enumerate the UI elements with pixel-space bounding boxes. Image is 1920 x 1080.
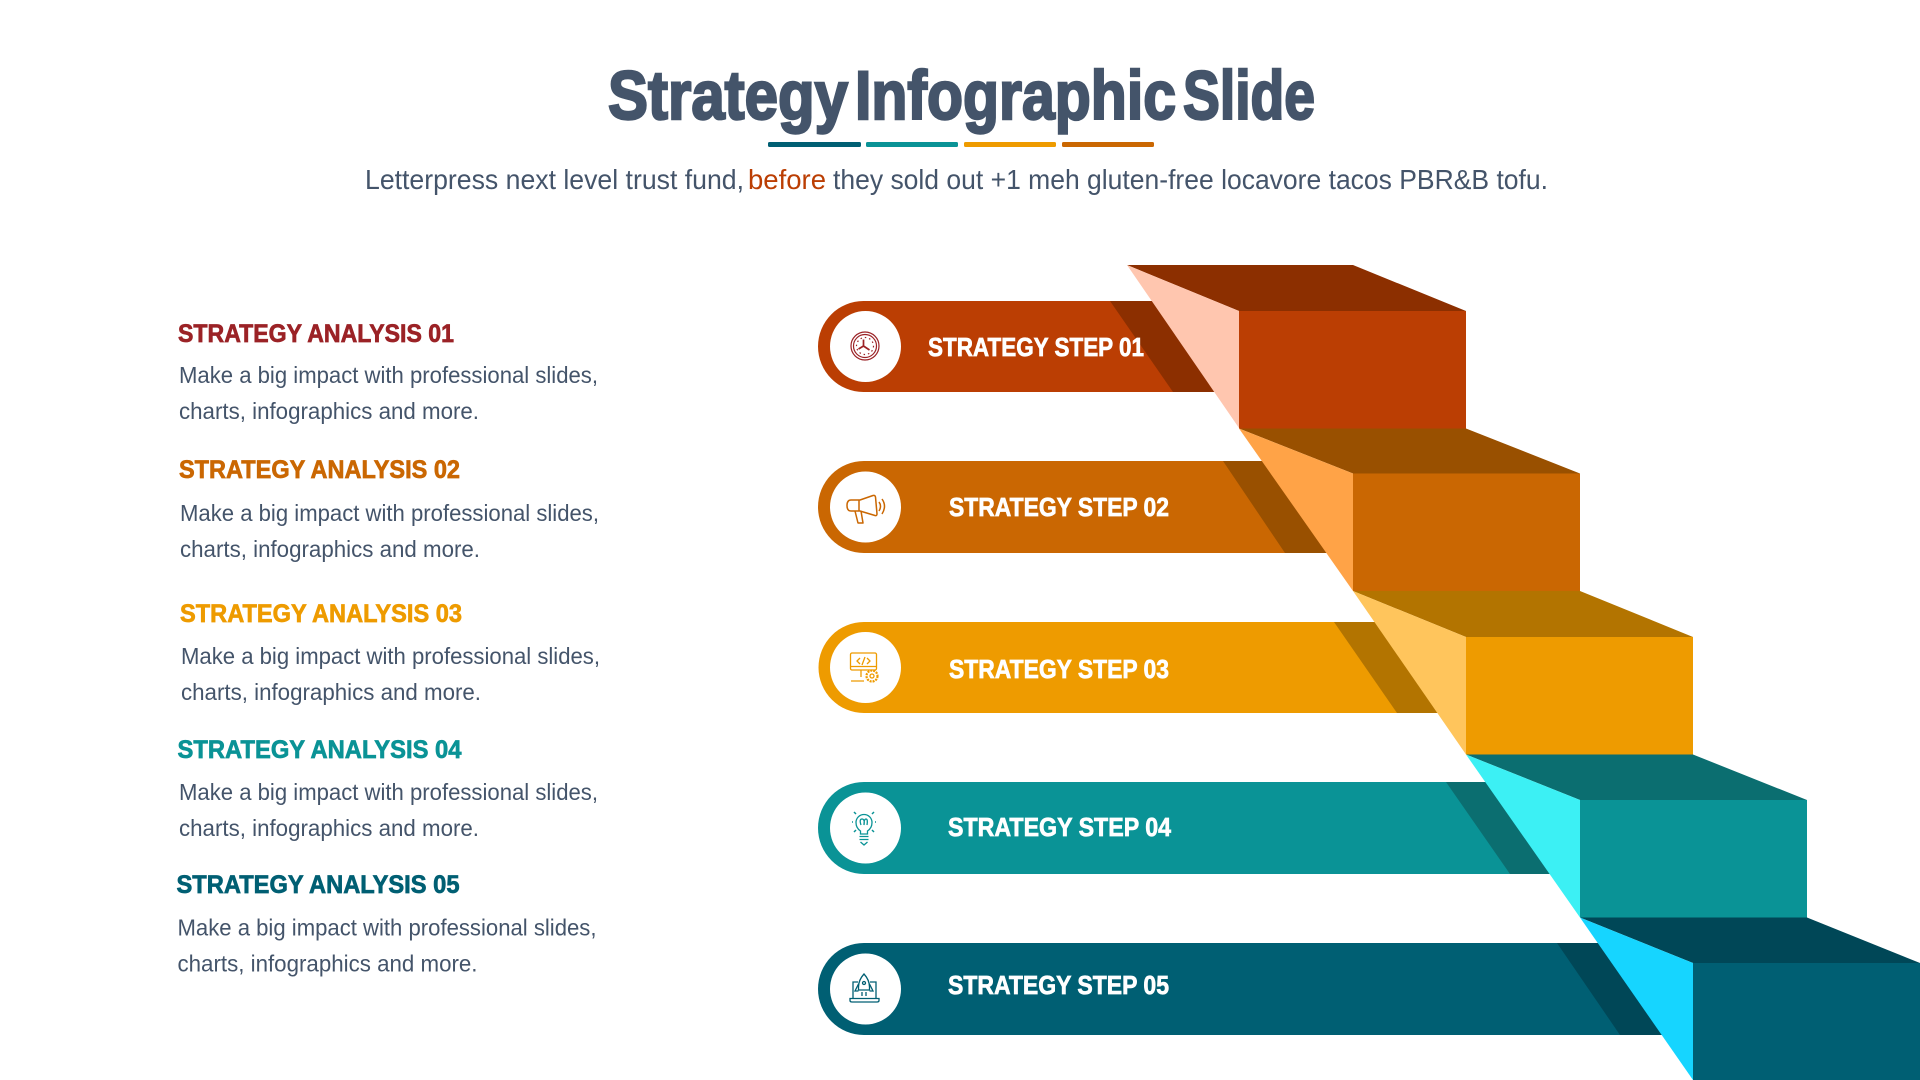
title (608, 57, 1315, 134)
text block: strategy analysis 02: Make a big impact with professional slides, (180, 500, 599, 526)
step bar 04 (818, 782, 1551, 874)
text block: strategy analysis 02 (179, 456, 599, 562)
text block: strategy analysis 04 (178, 736, 598, 841)
icon: light bulb (852, 812, 876, 845)
icon: clock (851, 332, 879, 360)
stair block 02 (1239, 428, 1580, 591)
text block: strategy analysis 03: charts, infographics and more. (181, 679, 481, 705)
text block: strategy analysis 03: Make a big impact with professional slides, (181, 643, 600, 669)
title: Slide (1183, 57, 1315, 134)
text block: strategy analysis 03: STRATEGY ANALYSIS 03 (180, 600, 462, 628)
step bar 02 (818, 461, 1327, 553)
label: strategy step 05: STRATEGY STEP 05 (948, 970, 1169, 1000)
subtitle: Letterpress next level trust fund, (365, 164, 744, 195)
icon: monitor with gear (850, 653, 878, 682)
text block: strategy analysis 01: Make a big impact with professional slides, (179, 362, 598, 388)
icon: megaphone (847, 495, 884, 523)
subtitle (365, 164, 1548, 195)
title: Infographic (855, 57, 1176, 134)
stair block 01 (1127, 265, 1466, 428)
text block: strategy analysis 05: Make a big impact with professional slides, (178, 914, 596, 940)
icon: rocket on laptop (850, 974, 879, 1002)
text block: strategy analysis 05: charts, infographics and more. (178, 950, 478, 976)
text block: strategy analysis 02: charts, infographics and more. (180, 536, 480, 562)
stair block 05 (1580, 918, 1920, 1080)
text block: strategy analysis 01: STRATEGY ANALYSIS 01 (178, 320, 454, 348)
step bar 03 (819, 622, 1439, 713)
text block: strategy analysis 03 (180, 600, 600, 705)
subtitle: they sold out +1 meh gluten-free locavore tacos PBR&B tofu. (833, 164, 1548, 195)
step bar 01 (818, 301, 1215, 392)
step bar 05 (818, 943, 1663, 1035)
text block: strategy analysis 05 (176, 871, 596, 976)
text block: strategy analysis 04: Make a big impact with professional slides, (179, 779, 598, 805)
label: strategy step 02: STRATEGY STEP 02 (949, 492, 1169, 522)
text block: strategy analysis 01: charts, infographics and more. (179, 398, 479, 424)
text block: strategy analysis 01 (178, 320, 598, 424)
text block: strategy analysis 02: STRATEGY ANALYSIS 02 (179, 456, 460, 484)
stair block 04 (1466, 754, 1807, 918)
label: strategy step 04: STRATEGY STEP 04 (948, 812, 1171, 842)
subtitle: before (748, 164, 826, 195)
title: Strategy (608, 57, 848, 134)
text block: strategy analysis 04: charts, infographics and more. (179, 815, 479, 841)
label: strategy step 01: STRATEGY STEP 01 (928, 332, 1144, 362)
text block: strategy analysis 05: STRATEGY ANALYSIS 05 (176, 871, 460, 899)
stair block 03 (1353, 591, 1693, 754)
title underline bars (768, 142, 1154, 147)
label: strategy step 03: STRATEGY STEP 03 (949, 654, 1169, 684)
text block: strategy analysis 04: STRATEGY ANALYSIS 04 (178, 736, 462, 764)
